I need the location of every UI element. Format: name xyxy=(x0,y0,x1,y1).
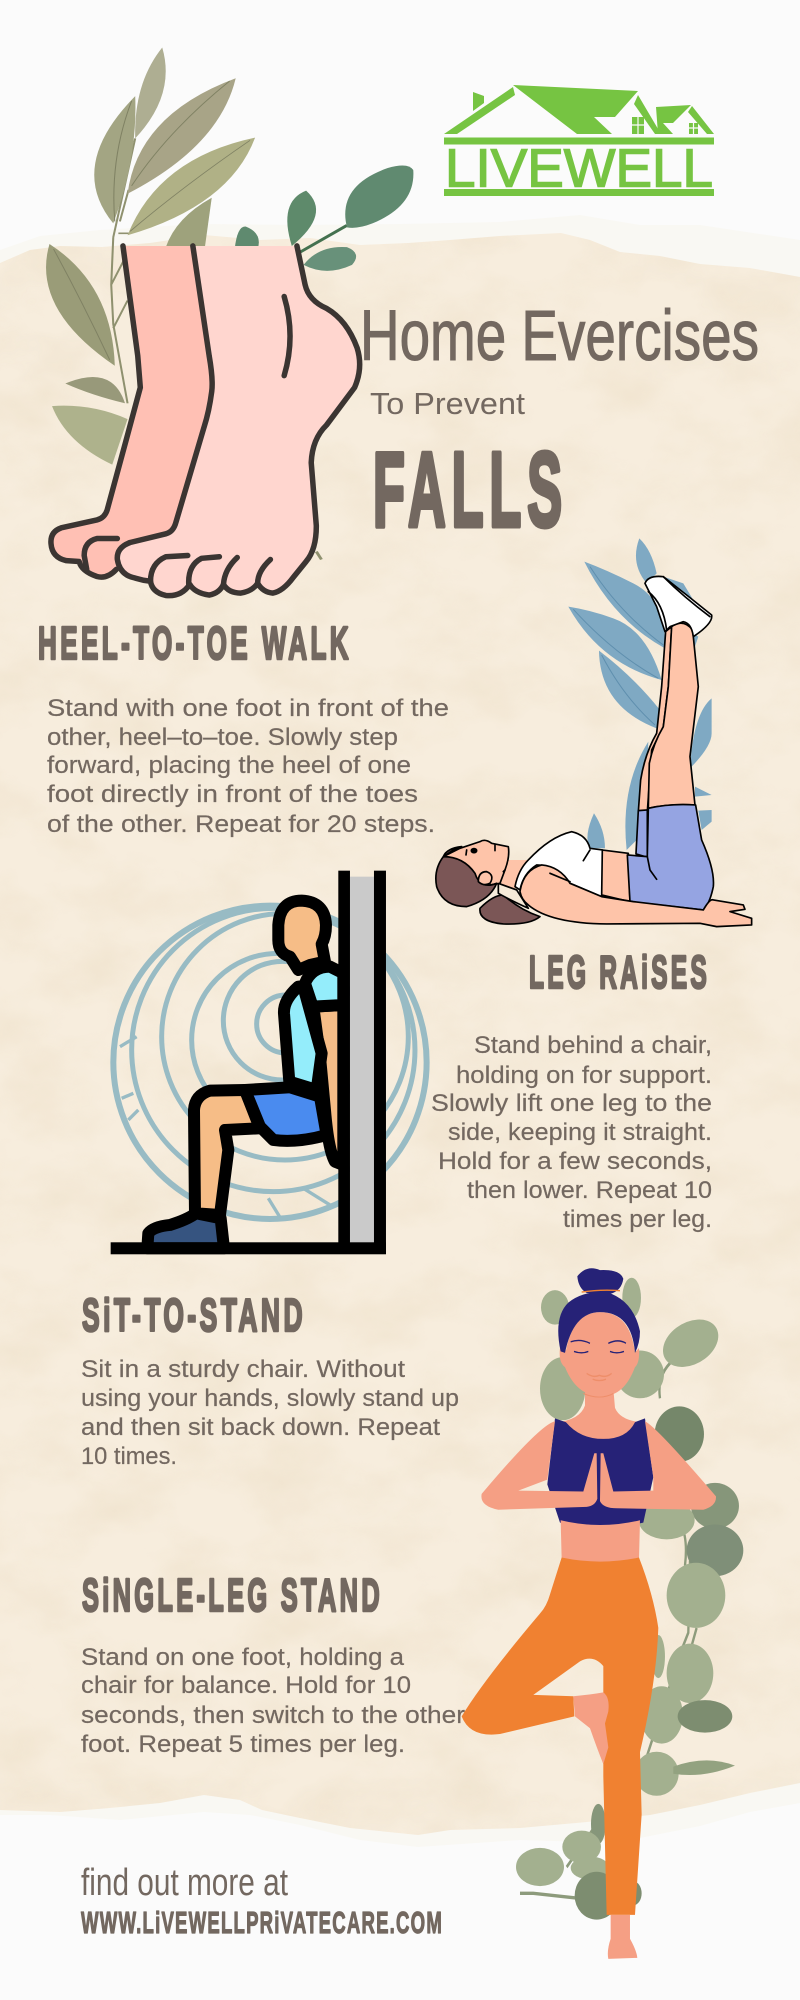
text: sit-to-stand instructions xyxy=(81,1356,459,1470)
text: heel-to-toe walk instructions: foot directly in front of the toes xyxy=(47,781,418,808)
green eucalyptus leaves xyxy=(235,166,413,559)
text: sit-to-stand instructions: and then sit back down. Repeat xyxy=(81,1414,440,1441)
text: leg raises instructions: holding on for support. xyxy=(456,1062,712,1089)
text: heel-to-toe walk instructions: of the other. Repeat for 20 steps. xyxy=(47,811,435,838)
footer: find out more at: find out more at xyxy=(81,1862,288,1904)
illustration: person doing wall sit xyxy=(111,871,386,1254)
text: single-leg stand instructions: chair for balance. Hold for 10 xyxy=(81,1672,411,1699)
sage leaf vine behind yoga figure xyxy=(516,1278,743,1920)
text: sit-to-stand instructions: Sit in a sturdy chair. Without xyxy=(81,1356,405,1383)
text: leg raises instructions: then lower. Repeat 10 xyxy=(467,1177,712,1204)
heading: heel-to-toe walk: HEEL-TO-TOE WALK xyxy=(38,617,352,669)
heading: single-leg stand: SiNGLE-LEG STAND xyxy=(82,1569,383,1621)
text: single-leg stand instructions: seconds, then switch to the other xyxy=(81,1702,465,1729)
illustration: woman in tree pose xyxy=(462,1268,716,1959)
text: leg raises instructions: times per leg. xyxy=(563,1206,712,1233)
text: leg raises instructions xyxy=(431,1032,712,1233)
blue concentric rings behind seated figure xyxy=(113,906,427,1220)
text: single-leg stand instructions: Stand on one foot, holding a xyxy=(81,1644,405,1671)
infographic canvas: FALLS xyxy=(373,431,568,549)
text: single-leg stand instructions xyxy=(81,1644,465,1758)
icon: two feet xyxy=(51,246,360,596)
logo: Livewell: LIVEWELL xyxy=(445,138,713,198)
text: heel-to-toe walk instructions: other, heel–to–toe. Slowly step xyxy=(47,724,398,751)
logo: Livewell xyxy=(444,85,714,198)
olive leaf sprig behind foot xyxy=(46,47,255,465)
text: leg raises instructions: Stand behind a chair, xyxy=(474,1032,712,1059)
text: sit-to-stand instructions: using your hands, slowly stand up xyxy=(81,1385,459,1412)
text: leg raises instructions: Slowly lift one leg to the xyxy=(431,1090,712,1117)
footer: website url: WWW.LiVEWELLPRiVATECARE.COM xyxy=(81,1905,443,1940)
heading: sit-to-stand: SiT-TO-STAND xyxy=(82,1289,306,1341)
text: heel-to-toe walk instructions xyxy=(47,695,449,838)
subtitle: To Prevent: To Prevent xyxy=(370,386,525,421)
text: sit-to-stand instructions: 10 times. xyxy=(81,1443,177,1470)
text: leg raises instructions: Hold for a few seconds, xyxy=(438,1148,712,1175)
text: leg raises instructions: side, keeping it straight. xyxy=(448,1119,712,1146)
illustration: woman doing leg raises xyxy=(436,576,752,927)
text: heel-to-toe walk instructions: Stand with one foot in front of the xyxy=(47,695,449,722)
text: single-leg stand instructions: foot. Repeat 5 times per leg. xyxy=(81,1731,405,1758)
blue leaves behind lying figure xyxy=(568,538,712,850)
text: heel-to-toe walk instructions: forward, placing the heel of one xyxy=(47,752,411,779)
